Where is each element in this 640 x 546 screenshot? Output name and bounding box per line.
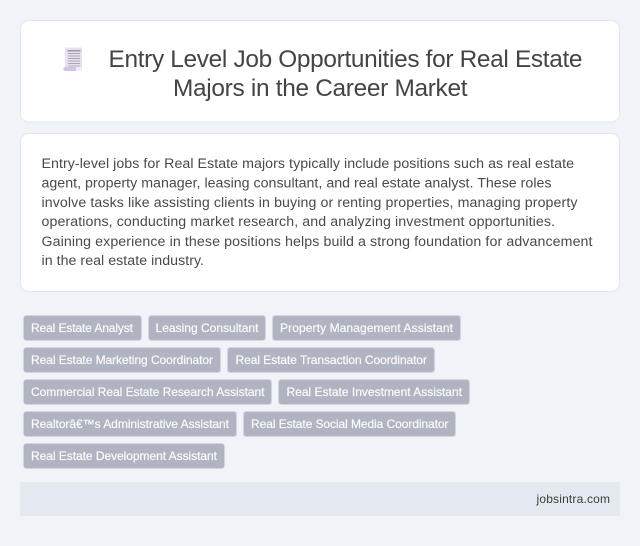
tag: Real Estate Development Assistant — [31, 449, 218, 463]
description text: Entry-level jobs for Real Estate majors typically include positions such as real estate — [42, 156, 574, 172]
tag — [228, 348, 434, 372]
tag — [272, 316, 460, 340]
tag: Property Management Assistant — [280, 321, 454, 335]
description text: Gaining experience in these positions helps build a strong foundation for advancement — [42, 234, 593, 250]
tag — [24, 348, 220, 372]
description text — [42, 156, 593, 269]
footer bar — [20, 482, 620, 516]
tag: Real Estate Social Media Coordinator — [251, 417, 448, 431]
icon: document scroll — [64, 48, 82, 71]
title: Majors in the Career Market — [173, 75, 468, 102]
tag — [24, 316, 142, 340]
tag: Realtorâ€™s Administrative Assistant — [31, 417, 230, 431]
tag — [24, 412, 236, 436]
tag — [24, 380, 272, 404]
description text: agent, property manager, leasing consultant, and real estate analyst. These roles — [42, 176, 552, 192]
tag: Commercial Real Estate Research Assistant — [31, 385, 265, 399]
description text: operations, conducting market research, and analyzing investment opportunities. — [42, 214, 555, 230]
tag: Real Estate Transaction Coordinator — [236, 353, 427, 367]
tag — [278, 380, 470, 404]
title — [108, 46, 582, 102]
tag list — [24, 316, 470, 468]
description text: involve tasks like assisting clients in buying or renting properties, managing property — [42, 195, 578, 211]
title: Entry Level Job Opportunities for Real Estate — [108, 46, 582, 73]
tag — [148, 316, 266, 340]
tag — [244, 412, 456, 436]
panel: title card — [20, 20, 620, 122]
tag — [24, 444, 224, 468]
panel: description card — [20, 134, 620, 292]
description text: in the real estate industry. — [42, 253, 204, 269]
footer source text: jobsintra.com — [536, 492, 610, 506]
tag: Real Estate Investment Assistant — [286, 385, 463, 399]
tag: Real Estate Marketing Coordinator — [31, 353, 213, 367]
tag: Real Estate Analyst — [31, 321, 134, 335]
tag: Leasing Consultant — [156, 321, 259, 335]
